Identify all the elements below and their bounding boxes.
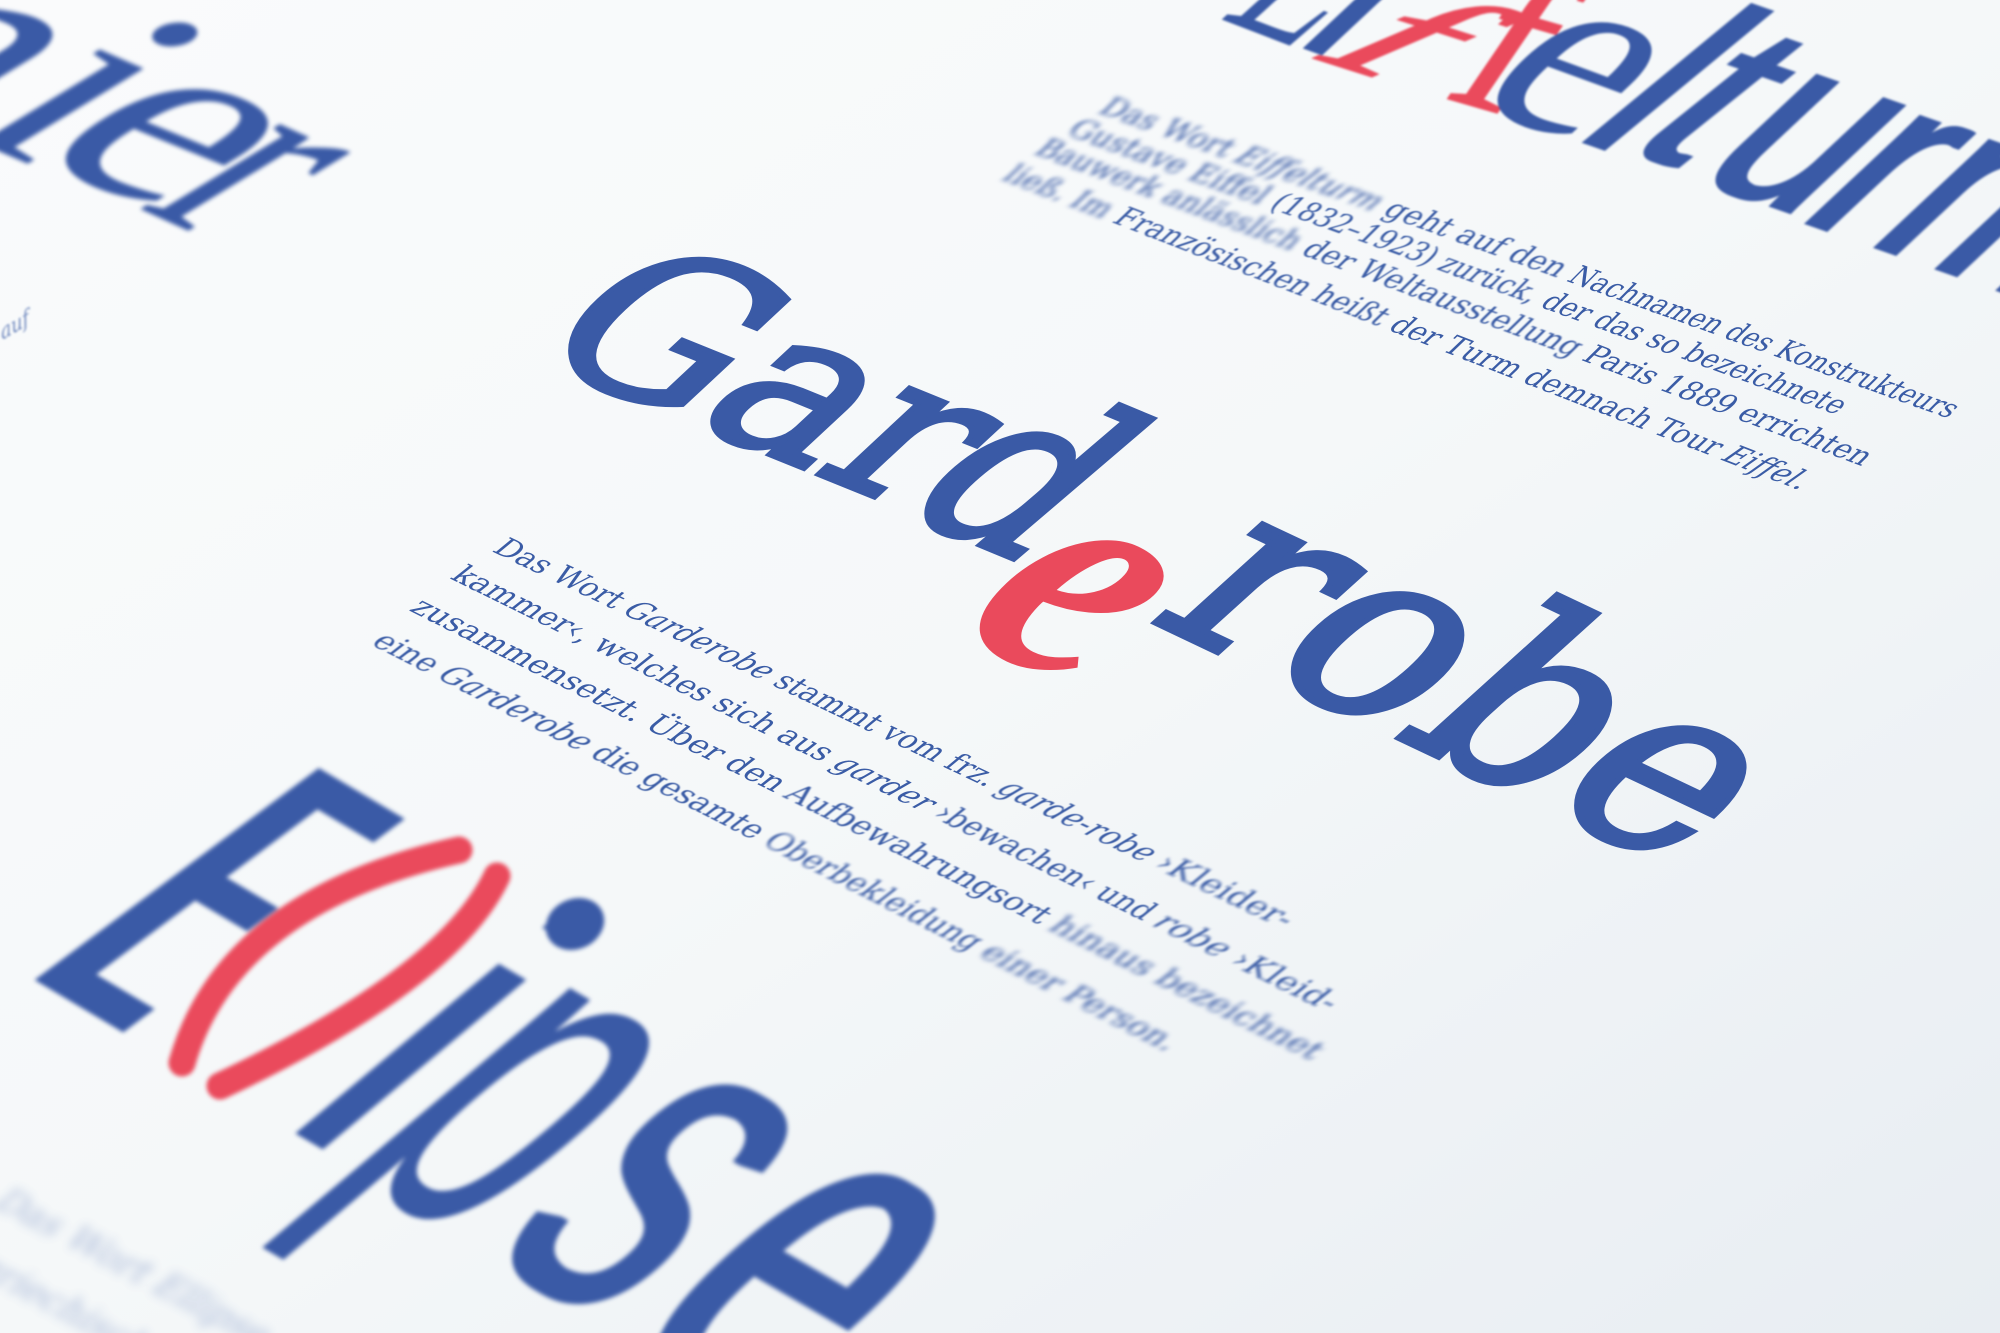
red elliptical ll — [182, 850, 497, 1086]
heading: Ellipse with red elliptical letters — [0, 701, 1138, 1333]
line 1: Das Wort Eiffelturm — [1091, 92, 1393, 217]
line 4: Oberbekleidung — [754, 826, 993, 956]
line 1 — [1091, 92, 1969, 424]
line 3: Bauwerk anlässlich — [1027, 133, 1312, 256]
letter u: u — [1643, 0, 2000, 262]
line 1: garde-robe — [988, 773, 1167, 868]
line 4 — [364, 626, 1189, 1057]
letter i: i — [211, 843, 672, 1220]
heading: nier (cropped word, top left) — [0, 0, 480, 280]
line 2: robe ›Kleid- — [1145, 907, 1349, 1017]
line 3: Paris 1889 errichten — [1574, 340, 1882, 472]
letters Gar: Gar — [482, 202, 1072, 550]
paragraph: Eiffelturm explanation — [995, 92, 1969, 496]
line 3: der Weltausstellung — [1294, 234, 1592, 362]
line 3: zusammensetzt. Über den — [402, 591, 798, 798]
line 2: kammer‹, welches sich aus garder — [443, 560, 948, 819]
line 2 — [1059, 114, 1857, 421]
heading: Eiffelturm (cropped word, top right) — [1171, 0, 2000, 347]
line 4: einer Person. — [972, 938, 1189, 1057]
line 3 — [1027, 133, 1882, 472]
paragraph: Garderobe explanation — [364, 533, 1349, 1066]
line 2: Gustave Eiffel — [1059, 114, 1280, 211]
line 2: der das so bezeichnete — [1533, 286, 1857, 421]
line 4: eine Garderobe die gesamte — [364, 626, 775, 845]
letter r: r — [70, 42, 480, 280]
line 2: (1832–1923) zurück, — [1262, 188, 1550, 309]
line 1: geht auf den — [1375, 194, 1577, 283]
letter d: d — [845, 347, 1210, 603]
line 1: Das Wort Garderobe stammt vom frz. — [485, 533, 1009, 793]
line 3: Aufbewahrungsort — [775, 778, 1062, 930]
line 3: hinaus bezeichnet — [1041, 911, 1334, 1066]
line 4: der Turm demnach Tour Eiffel. — [1381, 310, 1820, 496]
letters robe: robe — [1097, 443, 1867, 912]
line 1 — [485, 533, 1305, 934]
line 2 — [443, 560, 1349, 1017]
line 4 — [995, 159, 1820, 496]
letter p: p — [241, 846, 846, 1320]
round dot of i — [537, 889, 613, 959]
line 3 — [402, 591, 1336, 1066]
line 4: ließ. Im — [995, 159, 1123, 224]
line 4: Französischen heißt — [1105, 202, 1400, 332]
line 1: ›Kleider- — [1146, 848, 1305, 934]
line 2: ›bewachen‹ und — [925, 798, 1165, 926]
red italic letter e: e — [903, 401, 1282, 749]
heading: Garderobe with red e — [482, 202, 1867, 912]
